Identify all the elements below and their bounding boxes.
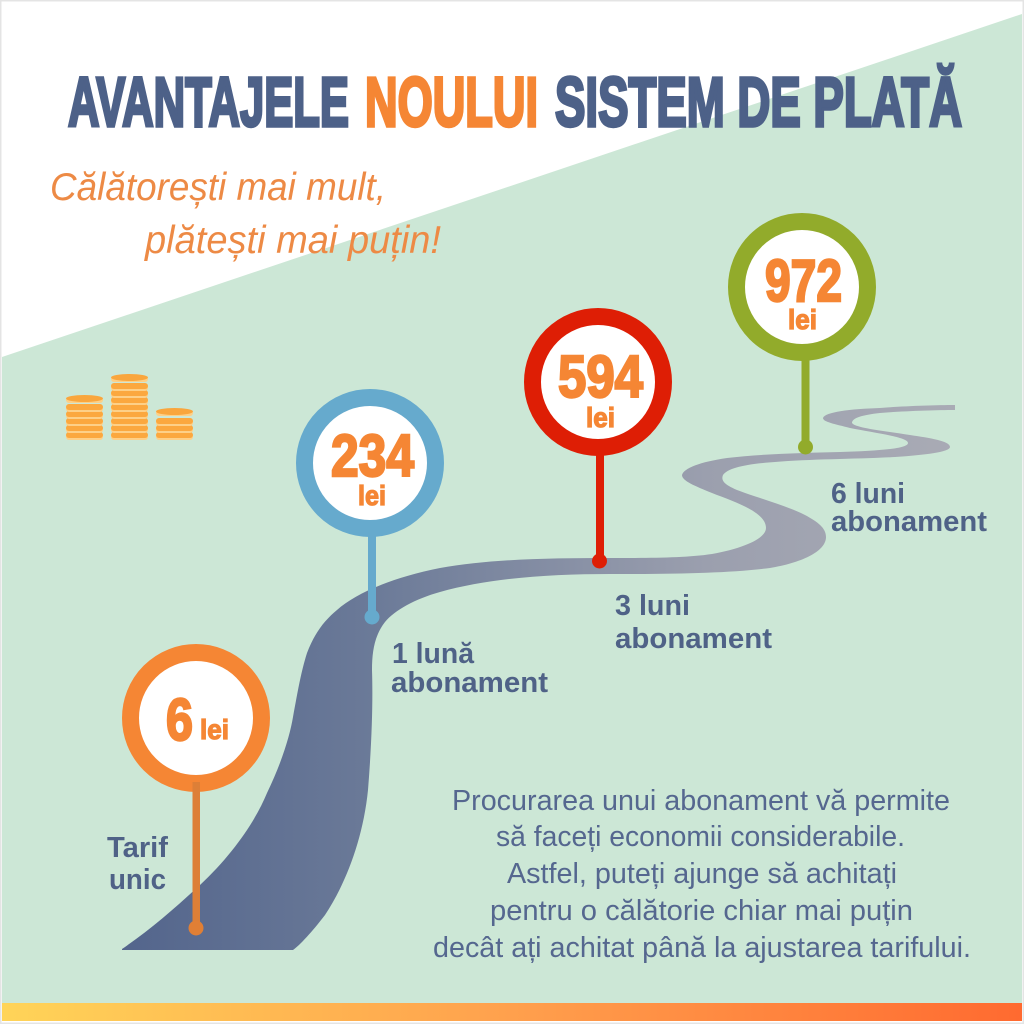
label: 1 luna abonament (391, 638, 548, 699)
value: 972 lei: lei (788, 304, 817, 335)
label: 6 luni abonament (831, 478, 987, 538)
label: 1 luna abonament: abonament (391, 667, 548, 699)
value: 234 lei: 234 (331, 423, 414, 489)
title: NOULUI (365, 63, 538, 141)
road (122, 405, 955, 950)
text block: explanation: Procurarea unui abonament vă permite (452, 785, 950, 817)
value: 6 lei: lei (200, 714, 229, 745)
text block: explanation: decât ați achitat până la ajustarea tarifului. (433, 932, 971, 964)
value: 972 lei (765, 248, 842, 335)
label: tarif unic: unic (109, 864, 166, 896)
pin: 3 luni (532, 316, 664, 568)
pin: tarif unic (130, 652, 262, 936)
value: 6 lei: 6 (166, 687, 193, 753)
value: 594 lei: lei (586, 402, 615, 433)
value: 234 lei: lei (358, 480, 386, 511)
tagline: Călătorești mai mult, (50, 166, 386, 209)
tagline: plătești mai puțin! (144, 219, 441, 262)
label: 6 luni abonament: 6 luni (831, 478, 905, 510)
pin: 6 luni (736, 222, 868, 454)
value: 972 lei: 972 (765, 248, 842, 314)
text block: explanation: Astfel, puteți ajunge să achitați (507, 858, 897, 890)
value: 594 lei (558, 344, 643, 433)
value: 594 lei: 594 (558, 344, 643, 410)
label: 3 luni abonament (615, 590, 772, 655)
text block: explanation: să faceți economii considerabile. (496, 821, 905, 853)
pin: 1 luna (304, 398, 436, 624)
label: tarif unic (107, 832, 168, 896)
label: tarif unic: Tarif (107, 832, 168, 864)
label: 1 luna abonament: 1 lună (392, 638, 475, 670)
label: 3 luni abonament: 3 luni (615, 590, 690, 622)
text block: explanation (433, 785, 971, 964)
icon: coin stacks (66, 374, 193, 440)
label: 6 luni abonament: abonament (831, 506, 987, 538)
title: AVANTAJELE (68, 63, 349, 141)
text block: explanation: pentru o călătorie chiar mai puțin (490, 895, 913, 927)
value: 234 lei (331, 423, 414, 511)
title (68, 63, 962, 141)
footer gradient bar (2, 1003, 1022, 1021)
value: 6 lei (166, 687, 229, 753)
tagline (50, 166, 441, 262)
label: 3 luni abonament: abonament (615, 623, 772, 655)
